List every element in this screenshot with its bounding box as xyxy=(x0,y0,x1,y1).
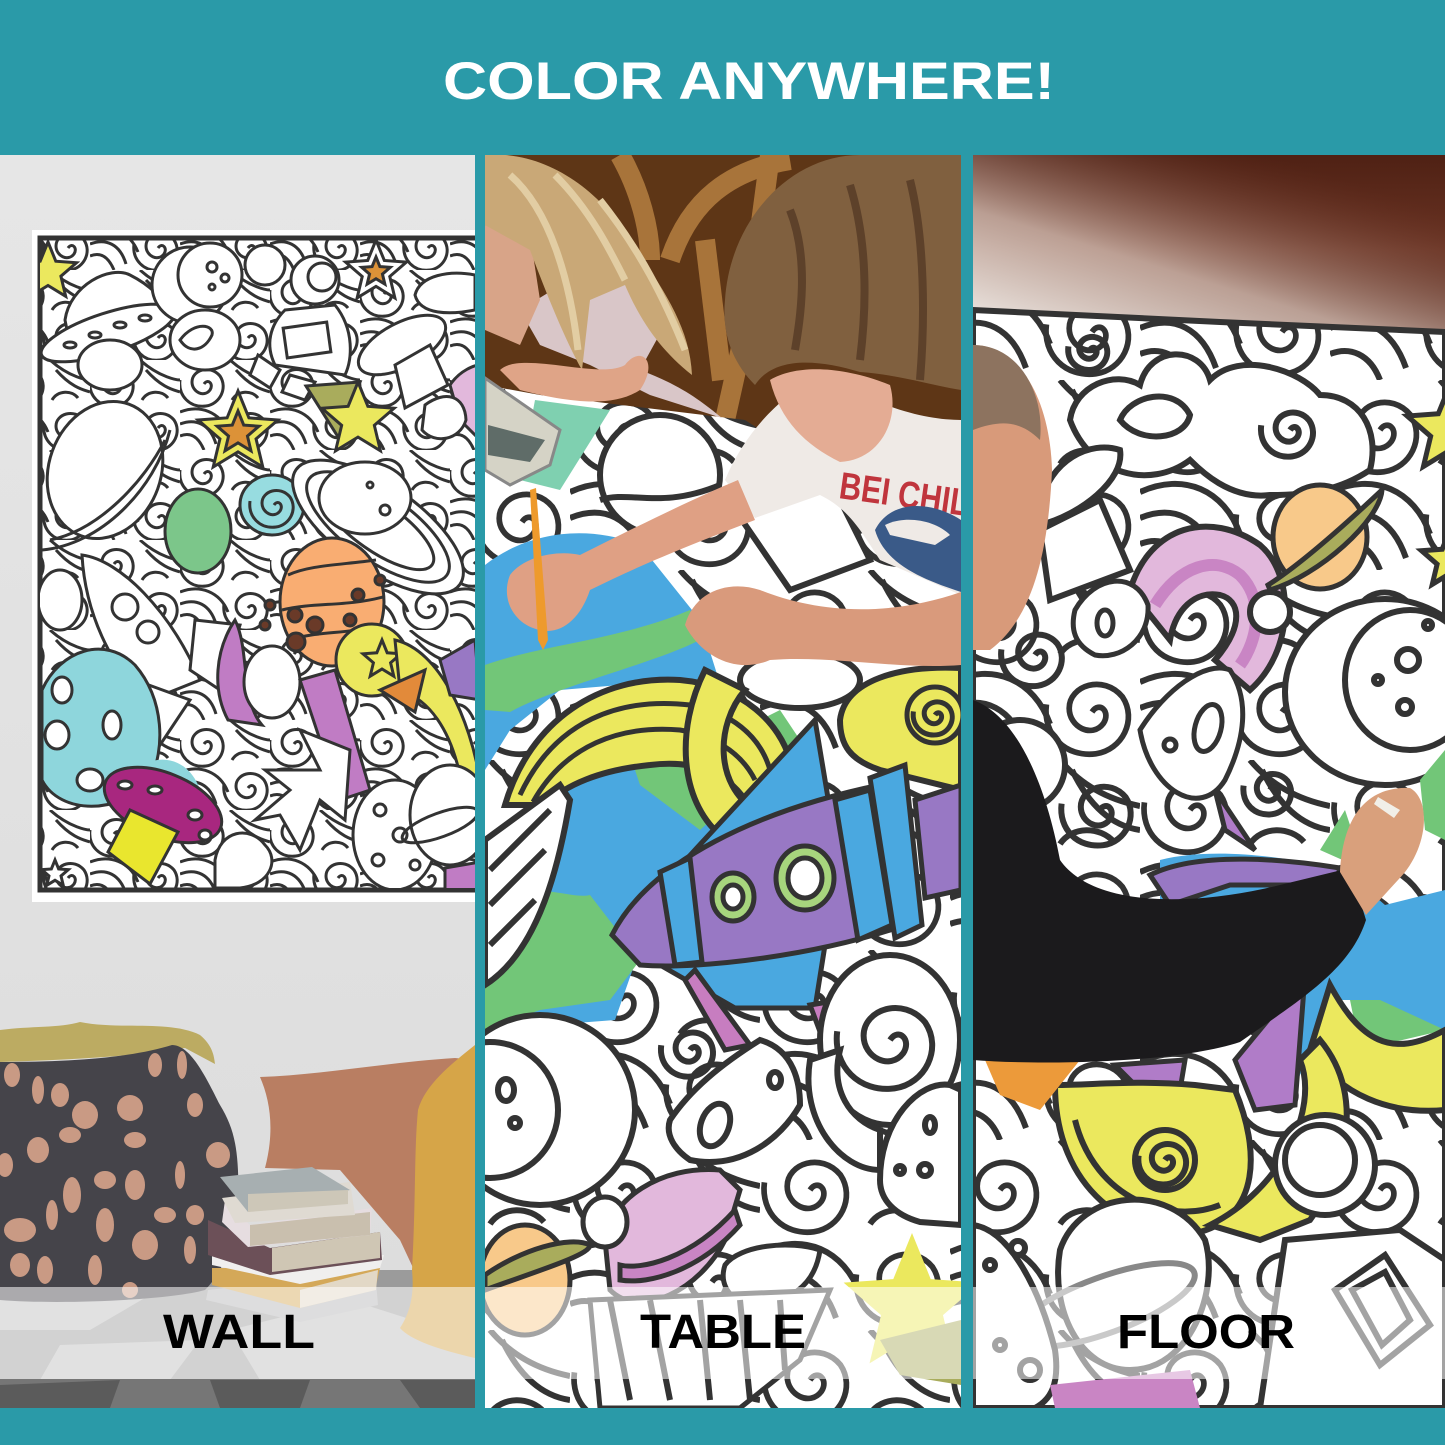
man's head xyxy=(973,345,1052,650)
moon xyxy=(1285,599,1445,785)
title: COLOR ANYWHERE! xyxy=(443,52,1055,111)
purple lower strip xyxy=(1050,1370,1200,1408)
boy face xyxy=(770,369,893,462)
green patches xyxy=(1320,750,1445,1050)
swirling clouds xyxy=(661,955,960,1170)
girl hair xyxy=(485,155,692,375)
magenta mushroom xyxy=(102,766,224,884)
orange planet xyxy=(480,1225,590,1335)
man's hand xyxy=(1340,788,1424,915)
yellow ribbons xyxy=(1055,985,1445,1240)
purple fins xyxy=(1115,790,1305,1110)
clouds xyxy=(1068,337,1373,496)
cupcake saucer xyxy=(590,1290,830,1408)
small ball xyxy=(1250,592,1290,632)
lilac arc xyxy=(448,364,475,437)
label: table: TABLE xyxy=(640,1306,806,1359)
teal corner area xyxy=(520,400,610,490)
hair highlights xyxy=(790,180,923,380)
spotted egg xyxy=(880,1085,961,1225)
shirt print xyxy=(837,465,971,592)
leaf print basket xyxy=(0,1045,238,1302)
mustard armchair xyxy=(400,1045,475,1358)
panel: wall xyxy=(0,155,490,1408)
rocket xyxy=(82,555,240,745)
small left planet xyxy=(38,570,82,630)
panel: table xyxy=(422,155,980,1408)
small asteroid xyxy=(723,1245,820,1305)
orange planet xyxy=(260,538,385,666)
flying saucer xyxy=(35,272,181,390)
blue sea xyxy=(485,533,722,770)
small swirl ball xyxy=(583,1197,627,1247)
yellow rainbow arcs xyxy=(505,670,790,835)
purple rocket body xyxy=(1150,859,1340,905)
cratered planet xyxy=(353,780,437,890)
olive blanket xyxy=(0,1022,215,1064)
orange fin xyxy=(985,1060,1080,1110)
cratered moon xyxy=(973,1225,1056,1408)
wooden chairs xyxy=(620,155,790,420)
white wave rings xyxy=(600,415,870,708)
floor xyxy=(0,1270,475,1408)
astronaut xyxy=(250,256,350,400)
blue earth xyxy=(485,763,790,1030)
olive block and yellow star xyxy=(306,382,360,440)
wood floor xyxy=(973,155,1445,345)
saturn rings xyxy=(291,458,465,596)
boy near arm xyxy=(685,586,961,666)
white clouds xyxy=(215,833,272,888)
purple rocket tail xyxy=(440,640,480,700)
orange planet xyxy=(1268,485,1382,590)
man's hair xyxy=(973,345,1041,440)
planet behind sleeve xyxy=(975,720,1065,810)
cupcake stripes xyxy=(610,1300,785,1400)
crayon box xyxy=(485,378,560,485)
terracotta pillow xyxy=(260,1058,475,1272)
cyan swirl xyxy=(240,475,304,535)
bottom teal strip xyxy=(0,1408,1445,1445)
swirls xyxy=(1001,635,1291,846)
asteroid xyxy=(422,397,466,439)
label band xyxy=(0,1287,1445,1379)
girl face xyxy=(485,225,540,345)
doodle poster on table xyxy=(485,385,961,1408)
green land strip xyxy=(485,610,700,712)
yellow stars on edge xyxy=(1407,385,1445,584)
pencil xyxy=(530,488,548,650)
boy t-shirt xyxy=(725,375,961,595)
white cloud xyxy=(415,273,475,313)
green continent xyxy=(485,890,640,1030)
starburst with orange centre xyxy=(346,240,406,298)
moon xyxy=(422,1015,635,1205)
teal cratered planet xyxy=(42,649,200,806)
large ringed planet xyxy=(42,400,172,552)
mushroom saucer xyxy=(1040,447,1130,600)
girl arm xyxy=(500,356,648,402)
shirt print: BEI CHIL xyxy=(837,465,971,525)
striped saucer xyxy=(485,785,570,985)
panel: floor xyxy=(973,155,1445,1408)
striped ball xyxy=(244,646,300,718)
green planet xyxy=(165,489,231,573)
boy arm reaching left xyxy=(507,480,755,631)
rocket xyxy=(612,720,961,1050)
boy hair xyxy=(724,155,961,390)
stripes on saucer xyxy=(490,810,550,945)
pink rainbow xyxy=(1130,527,1285,690)
mushroom saucer xyxy=(356,314,449,410)
label: floor: FLOOR xyxy=(1117,1306,1295,1359)
label: wall: WALL xyxy=(163,1306,315,1359)
asteroid xyxy=(669,1040,800,1162)
saturn xyxy=(1006,1200,1209,1370)
striped ball xyxy=(245,245,285,285)
asteroid large xyxy=(1140,668,1243,798)
bottom-left small star xyxy=(42,860,68,885)
astronaut xyxy=(1260,1115,1445,1408)
moon xyxy=(152,243,242,370)
yellow corner star xyxy=(40,240,80,300)
yellow swirl xyxy=(840,668,963,790)
yellow star xyxy=(844,1233,980,1385)
explosion burst xyxy=(255,730,350,850)
room background xyxy=(485,155,961,455)
floor glare xyxy=(973,155,1445,330)
wall background xyxy=(0,155,475,1270)
man's sweater xyxy=(973,700,1366,1063)
doodle poster on floor xyxy=(973,310,1445,1408)
star with orange centre xyxy=(198,391,278,467)
purple swirl xyxy=(218,620,262,725)
saturn at edge xyxy=(400,764,475,866)
purple beam xyxy=(300,670,370,800)
pink swirl xyxy=(605,1170,740,1302)
asteroid small xyxy=(1073,581,1148,656)
coloring poster on wall xyxy=(19,230,490,902)
girl shirt xyxy=(520,258,722,418)
stack of books xyxy=(206,1167,384,1322)
purple corner xyxy=(444,862,475,888)
blue earth xyxy=(1160,854,1445,1100)
yellow swirl xyxy=(336,624,480,780)
panel gutters xyxy=(475,155,973,1408)
marker xyxy=(1374,797,1400,818)
header banner xyxy=(0,0,1445,155)
